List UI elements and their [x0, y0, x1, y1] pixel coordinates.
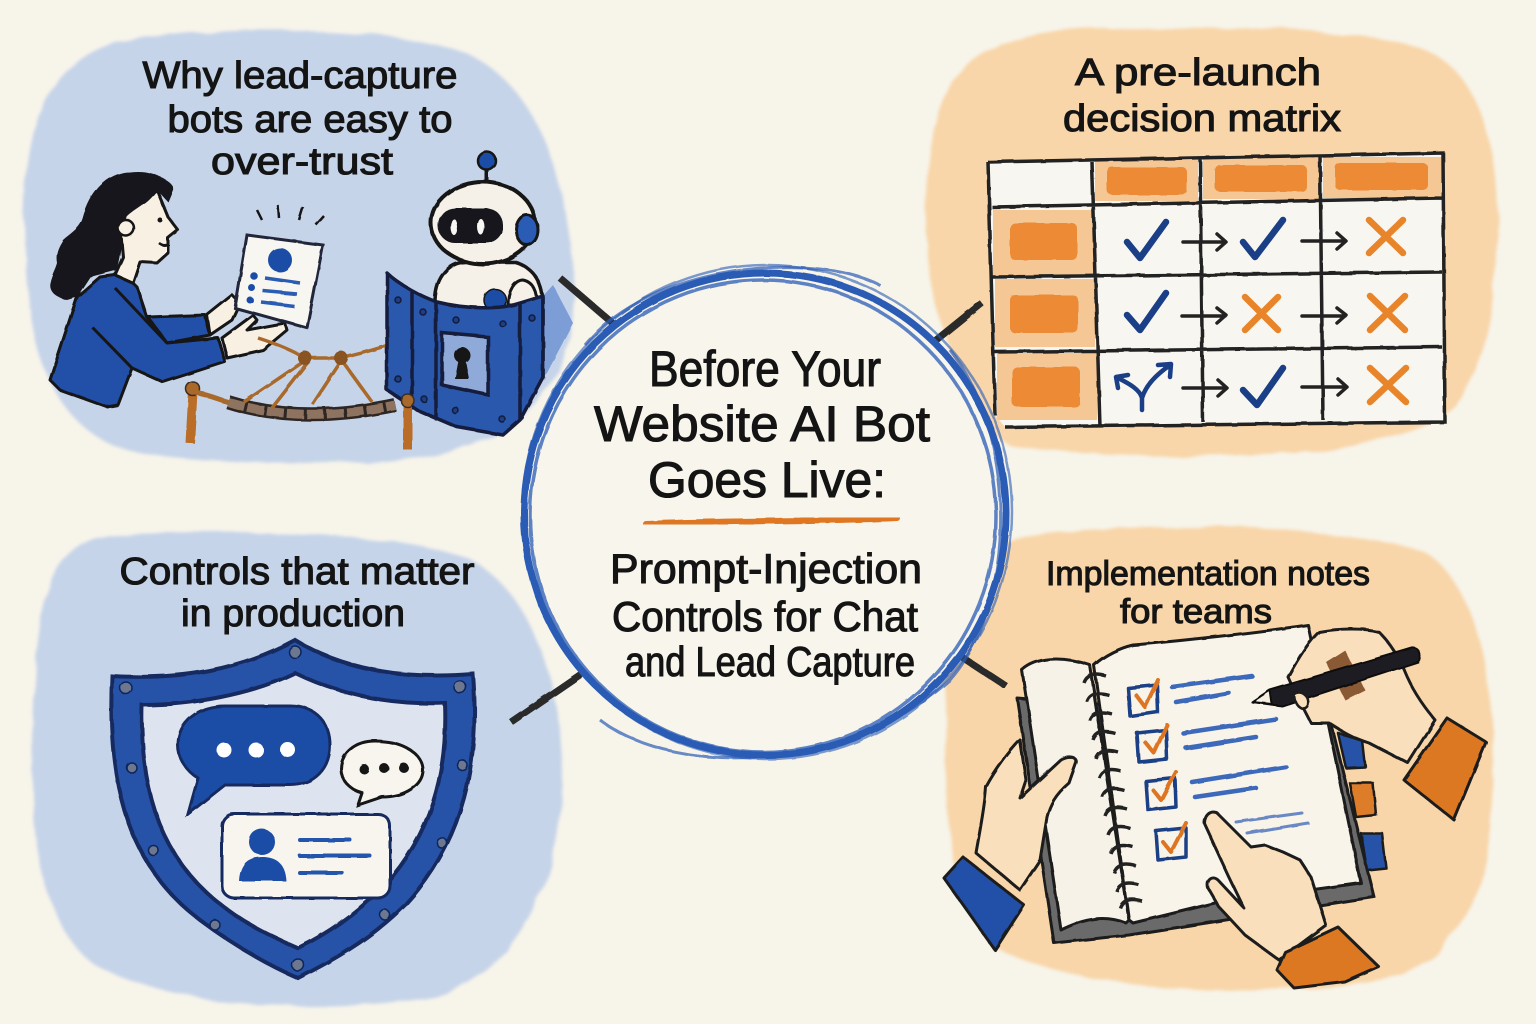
checklist	[1128, 676, 1308, 860]
connector: top-left	[560, 278, 617, 327]
heading: panel 3: in production	[181, 593, 405, 635]
icon: left hand holding notebook	[944, 740, 1076, 950]
icon: armored barrier with keyhole	[387, 273, 573, 435]
heading: panel 1: bots are easy to	[168, 99, 452, 141]
orange underline	[646, 518, 897, 524]
central title	[594, 341, 930, 508]
connector: top-right	[930, 303, 982, 345]
heading: panel 4	[1046, 555, 1370, 631]
divider tabs	[1338, 733, 1365, 768]
heading: panel 1	[142, 55, 458, 183]
heading: panel 2: A pre-launch	[1075, 52, 1321, 94]
table: decision matrix	[988, 153, 1445, 427]
central subtitle	[610, 545, 922, 685]
central title: Website AI Bot	[594, 396, 930, 452]
icon: small chat bubble	[341, 741, 423, 805]
icon: open spiral notebook	[1017, 625, 1386, 943]
center circle	[522, 265, 1012, 759]
icon: large chat bubble	[178, 706, 330, 814]
central title: Goes Live:	[648, 452, 886, 508]
icon: contact card	[222, 814, 390, 898]
panel: controls that matter in production	[32, 533, 562, 1006]
heading: panel 1: over-trust	[211, 141, 393, 183]
heading: panel 1: Why lead-capture	[142, 55, 458, 97]
heading: panel 2: decision matrix	[1063, 98, 1341, 140]
icon: security shield	[111, 640, 475, 978]
panel: implementation notes for teams	[944, 527, 1493, 990]
orange swatches	[1010, 163, 1428, 407]
connector: bottom-left	[511, 668, 590, 722]
icon: pointing hand	[1204, 812, 1379, 988]
central subtitle: Controls for Chat	[612, 593, 918, 640]
heading: panel 3	[120, 551, 475, 635]
heading: panel 3: Controls that matter	[120, 551, 475, 593]
heading: panel 4: Implementation notes	[1046, 555, 1370, 593]
central subtitle: and Lead Capture	[625, 638, 915, 685]
grid lines	[988, 153, 1445, 427]
icon: profile document	[235, 205, 324, 328]
icon: rope barrier	[186, 338, 397, 443]
connector: bottom-right	[948, 648, 1006, 686]
heading: panel 4: for teams	[1120, 593, 1272, 631]
heading: panel 2	[1063, 52, 1341, 140]
notebook spiral	[1084, 675, 1142, 908]
panel: why lead-capture bots are easy to over-trust	[25, 29, 575, 464]
panel: a pre-launch decision matrix	[925, 27, 1497, 456]
icon: robot behind shield	[431, 152, 543, 330]
icon: woman holding a document	[50, 171, 287, 407]
checks, crosses and arrows	[1116, 220, 1406, 410]
pale orange header and row cells	[993, 157, 1442, 420]
central subtitle: Prompt-Injection	[610, 545, 922, 592]
central title: Before Your	[649, 341, 881, 397]
icon: right rope post	[402, 394, 414, 450]
icon: hand writing with pen	[1252, 629, 1486, 820]
